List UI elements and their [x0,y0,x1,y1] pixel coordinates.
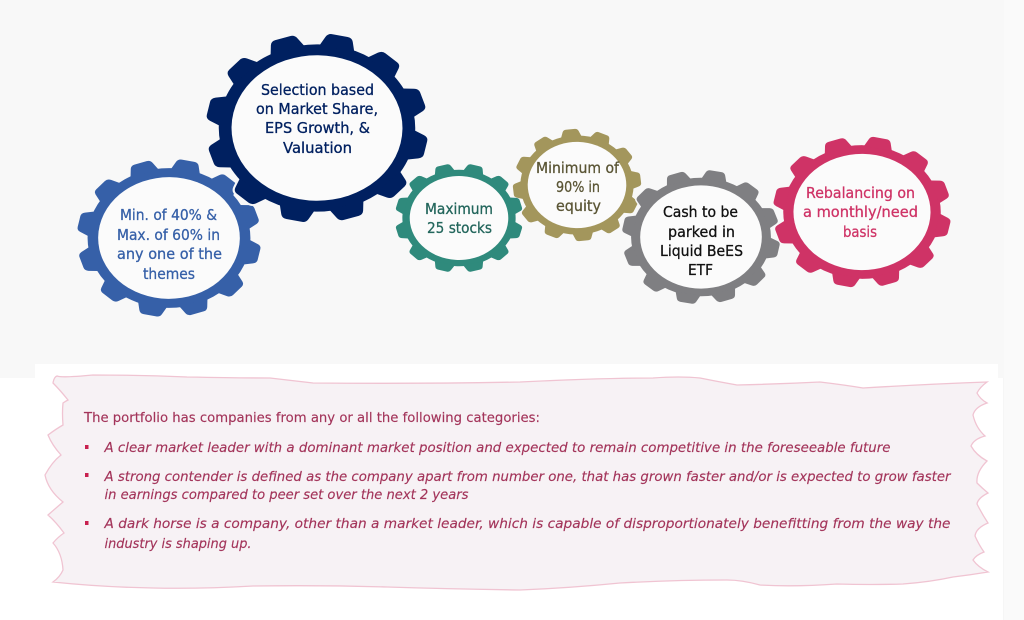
bullet: strong contender: A strong contender is defined as the company apart from number one, that has grown faster and/or is expected to grow faster [104,469,952,485]
panel: portfolio categories [45,375,988,590]
gear text: equity minimum: 90% in [556,178,600,196]
gear: selection criteria [185,16,449,240]
panel background: wavy torn-paper shape [45,375,988,590]
gear text: selection criteria [256,81,378,157]
gear text: cash parking: parked in [668,223,735,241]
gear text: selection criteria: Valuation [283,139,352,157]
bullet: dark horse: industry is shaping up. [104,536,252,552]
gear text: equity minimum: Minimum of [536,159,619,177]
gear text: selection criteria: on Market Share, [256,100,378,118]
bullet: dark horse: A dark horse is a company, other than a market leader, which is capable of disproportionately benefitting from the way the [103,516,950,532]
gear text: selection criteria: EPS Growth, & [265,119,370,137]
gear text: rebalancing: Rebalancing on [806,184,915,202]
gear text: cash parking [660,203,743,279]
gear text: rebalancing: basis [843,223,877,241]
gear text: equity minimum: equity [556,197,601,215]
bullet: strong contender: in earnings compared to peer set over the next 2 years [104,487,468,503]
gear text: equity minimum [536,159,619,215]
gear text: cash parking: Cash to be [663,203,738,221]
gear text: theme allocation: any one of the [117,245,222,263]
gear text: theme allocation: Min. of 40% & [120,206,217,224]
gear: theme allocation [60,144,278,332]
gear: rebalancing [756,122,968,302]
bullet: market leader: A clear market leader with a dominant market position and expected to remain competitive in the foreseeable future [104,440,891,456]
gear text: maximum stocks: 25 stocks [427,219,492,237]
gear text: theme allocation [117,206,222,283]
gear text: rebalancing: a monthly/need [803,203,918,221]
gear: equity minimum [493,111,661,259]
panel intro text: The portfolio has companies from any or all the following categories: [83,410,540,426]
gear text: maximum stocks: Maximum [425,200,493,218]
gear text: rebalancing [803,184,918,241]
bullet: strong contender [85,469,952,503]
gear text: theme allocation: Max. of 60% in [117,226,220,244]
gear: cash parking [608,158,794,316]
gear text: theme allocation: themes [143,265,195,283]
gear text: cash parking: Liquid BeES [660,242,743,260]
gear text: selection criteria: Selection based [261,81,374,99]
gear text: maximum stocks [425,200,493,237]
gear: maximum stocks [381,151,537,285]
bullet: dark horse [85,516,950,552]
gear text: cash parking: ETF [688,261,713,279]
